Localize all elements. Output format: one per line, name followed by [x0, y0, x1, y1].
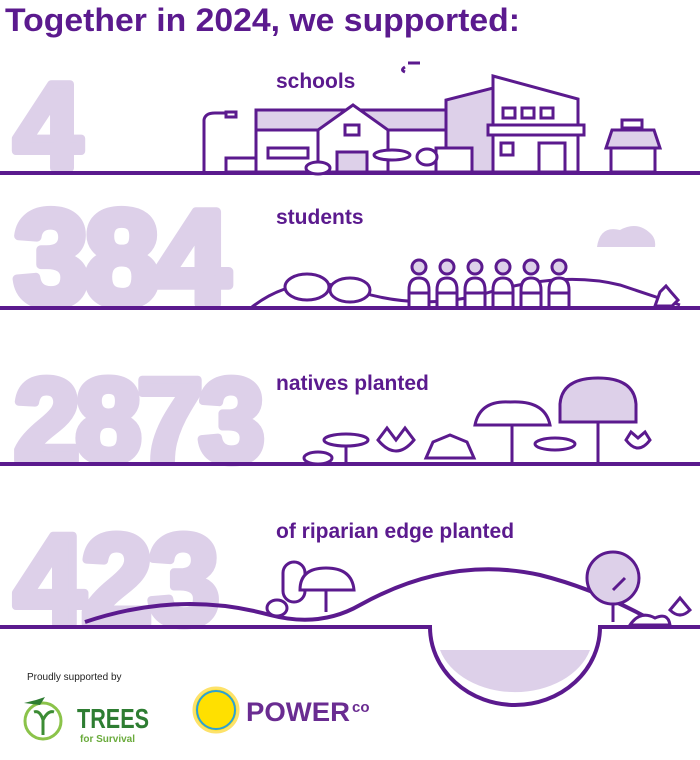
illustration: natives planted	[304, 378, 650, 464]
label: schools: schools	[276, 70, 355, 93]
water in bowl	[440, 650, 590, 692]
ground lines	[0, 173, 700, 705]
big number: 384: 384	[14, 184, 229, 333]
big number: 4: 4	[14, 58, 82, 194]
illustration: students	[252, 226, 680, 307]
big number: 423: 423	[14, 509, 216, 652]
label: riparian: of riparian edge planted	[276, 520, 514, 543]
sponsor text: Proudly supported by	[27, 672, 122, 683]
logo: Trees for Survival: for Survival	[80, 734, 135, 745]
illustration: schools	[204, 63, 660, 174]
label: natives planted: natives planted	[276, 372, 429, 395]
logo: Powerco: co	[352, 699, 370, 716]
logo: Powerco: POWER	[246, 697, 350, 727]
title: Together in 2024, we supported:	[5, 2, 520, 38]
illustration: six students	[409, 260, 569, 306]
logo: Powerco	[194, 688, 370, 732]
big number: 2873: 2873	[14, 355, 261, 487]
label: students: students	[276, 206, 364, 229]
illustration: riparian	[85, 569, 660, 625]
logo: Trees for Survival	[24, 697, 149, 745]
logo: Trees for Survival: TREES	[77, 703, 149, 734]
